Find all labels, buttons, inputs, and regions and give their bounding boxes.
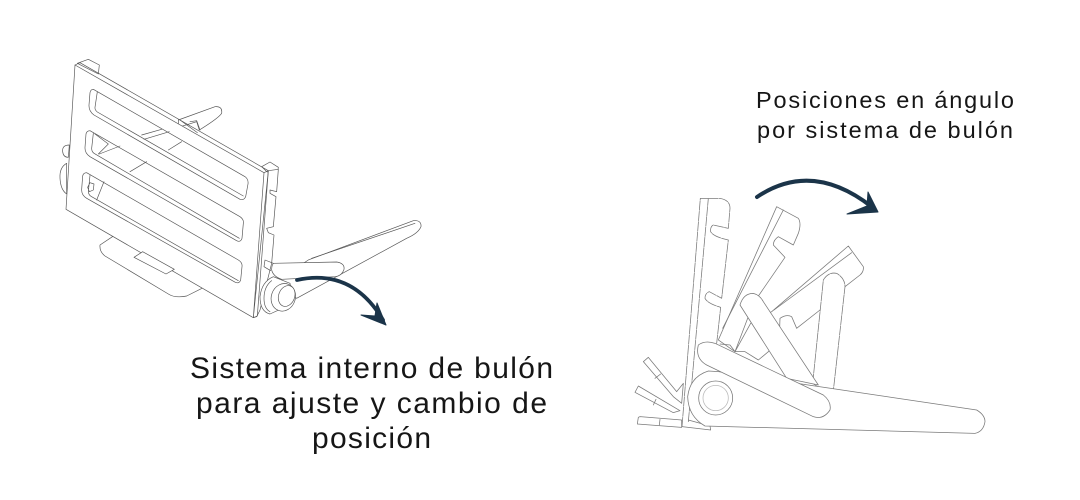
text: pin system caption: posición [312, 422, 431, 455]
bottom foot plate [100, 234, 204, 297]
second angled plate [718, 207, 800, 352]
rear details seen through slots [130, 120, 200, 172]
raised arm [813, 273, 845, 397]
illustration: bracket angle positions [635, 198, 985, 433]
right side tab [262, 162, 278, 175]
rear arm behind plate [178, 107, 222, 130]
text: pin system caption: para ajuste y cambio de [196, 387, 547, 420]
hinge washer [260, 277, 293, 314]
arrow: right curved arrow [757, 181, 878, 214]
slot 3 [82, 173, 242, 283]
text: angle positions caption: Posiciones en ángulo [756, 87, 1014, 113]
rear arm of right lever [273, 221, 421, 298]
arrow: left curved arrow [297, 278, 386, 325]
vertical plate [682, 198, 730, 427]
text: angle positions caption [756, 87, 1014, 143]
main long arm [688, 371, 985, 433]
pin circle [699, 381, 733, 415]
front plate [66, 65, 264, 318]
front handle [698, 342, 830, 417]
text: pin system caption: Sistema interno de bulón [190, 352, 553, 385]
hinge lever handle [272, 262, 344, 279]
slot 1 [89, 89, 248, 200]
washer teeth [720, 344, 735, 352]
third angled plate [735, 246, 863, 360]
diagonal arm [740, 293, 818, 385]
rear pin on left side [60, 145, 69, 194]
illustration: bracket with internal pin system [60, 59, 421, 318]
side edge with notches [253, 169, 278, 318]
small left tab positions [635, 357, 683, 427]
text: pin system caption [190, 352, 553, 455]
text: angle positions caption: por sistema de bulón [757, 117, 1013, 143]
slot 2 [85, 131, 243, 241]
pin head [267, 280, 299, 315]
foot slot [134, 252, 174, 274]
top tab [77, 59, 99, 74]
